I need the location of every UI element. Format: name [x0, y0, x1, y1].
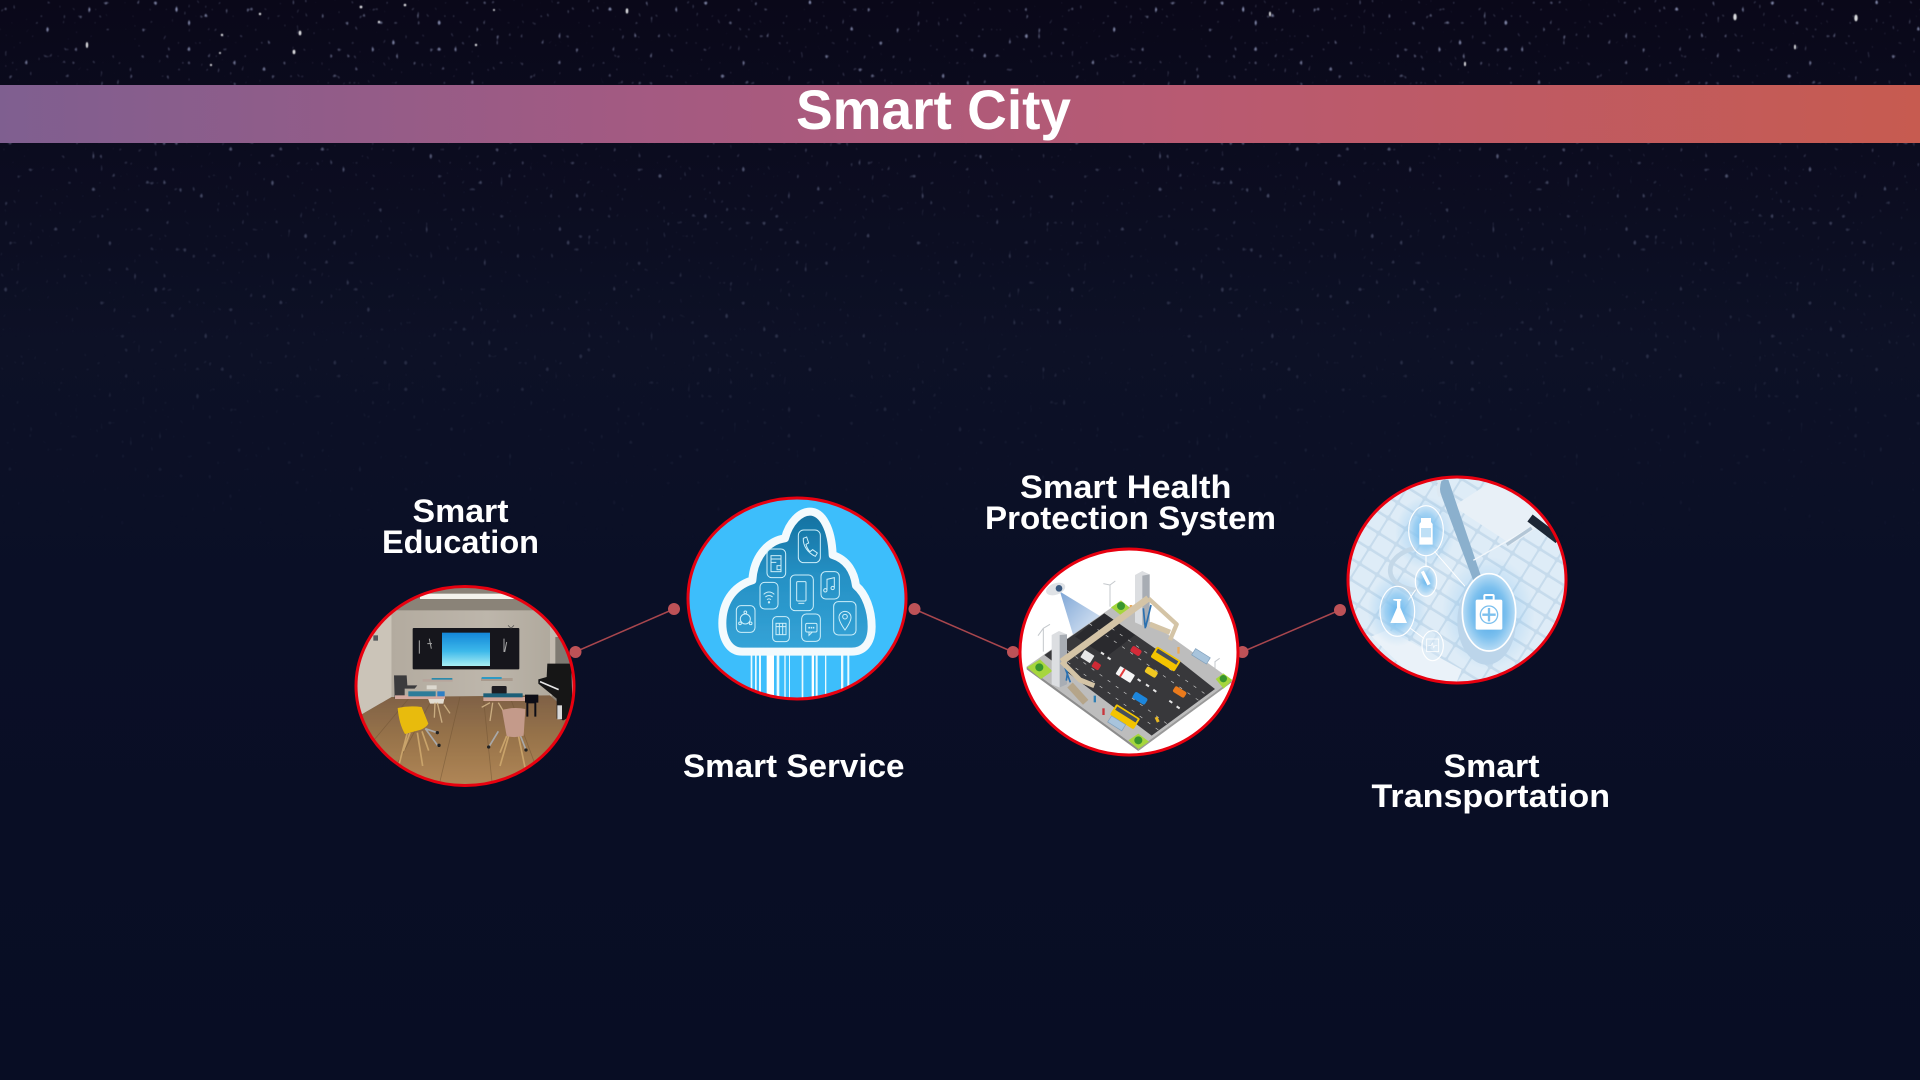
vehicles [1080, 645, 1187, 729]
road platform [1027, 601, 1232, 748]
green corners [1027, 600, 1232, 749]
health icon circles [1380, 506, 1516, 661]
stethoscope [1390, 480, 1516, 665]
label: smart health protection system [985, 469, 1276, 536]
blue supports [1065, 605, 1151, 682]
lane markings [1052, 624, 1207, 730]
label: smart transportation [1372, 748, 1610, 814]
label: smart education: Education [382, 524, 539, 560]
label: smart education [382, 493, 539, 560]
network lines [1408, 551, 1465, 639]
image: cloud services circle [686, 496, 908, 700]
camera cone [1060, 592, 1100, 634]
image: medical technology circle [1345, 473, 1575, 693]
image: classroom photo circle [354, 585, 576, 787]
street lamps [1038, 580, 1220, 668]
desks and dark chairs [394, 675, 538, 723]
title banner [0, 78, 1920, 143]
label: smart transportation: Smart [1444, 748, 1540, 784]
pedestrian bridge [1062, 598, 1177, 702]
connector: education to service [570, 603, 680, 658]
piano [538, 664, 573, 720]
cloud data stripes [751, 655, 849, 702]
label: smart health protection system: Protection System [985, 500, 1276, 536]
label: smart transportation: Transportation [1372, 778, 1610, 814]
pink chair [487, 708, 528, 767]
label: smart service: Smart Service [683, 748, 904, 784]
towers [1052, 571, 1150, 688]
yellow chair [398, 706, 441, 766]
connector: service to road image [908, 603, 1019, 658]
connector: road image to medical image [1236, 604, 1346, 658]
bus stops [1108, 649, 1210, 731]
keyboard frame [1457, 484, 1545, 544]
people [1094, 605, 1180, 723]
image: smart road circle [1015, 545, 1245, 760]
label: smart education: Smart [412, 493, 509, 529]
title: Smart City [796, 78, 1071, 141]
camera [1046, 582, 1066, 596]
label: smart health protection system: Smart Health [1020, 469, 1232, 505]
blackboard [413, 625, 519, 669]
pen [1473, 518, 1558, 560]
app icons [736, 530, 856, 642]
cloud [722, 512, 872, 652]
